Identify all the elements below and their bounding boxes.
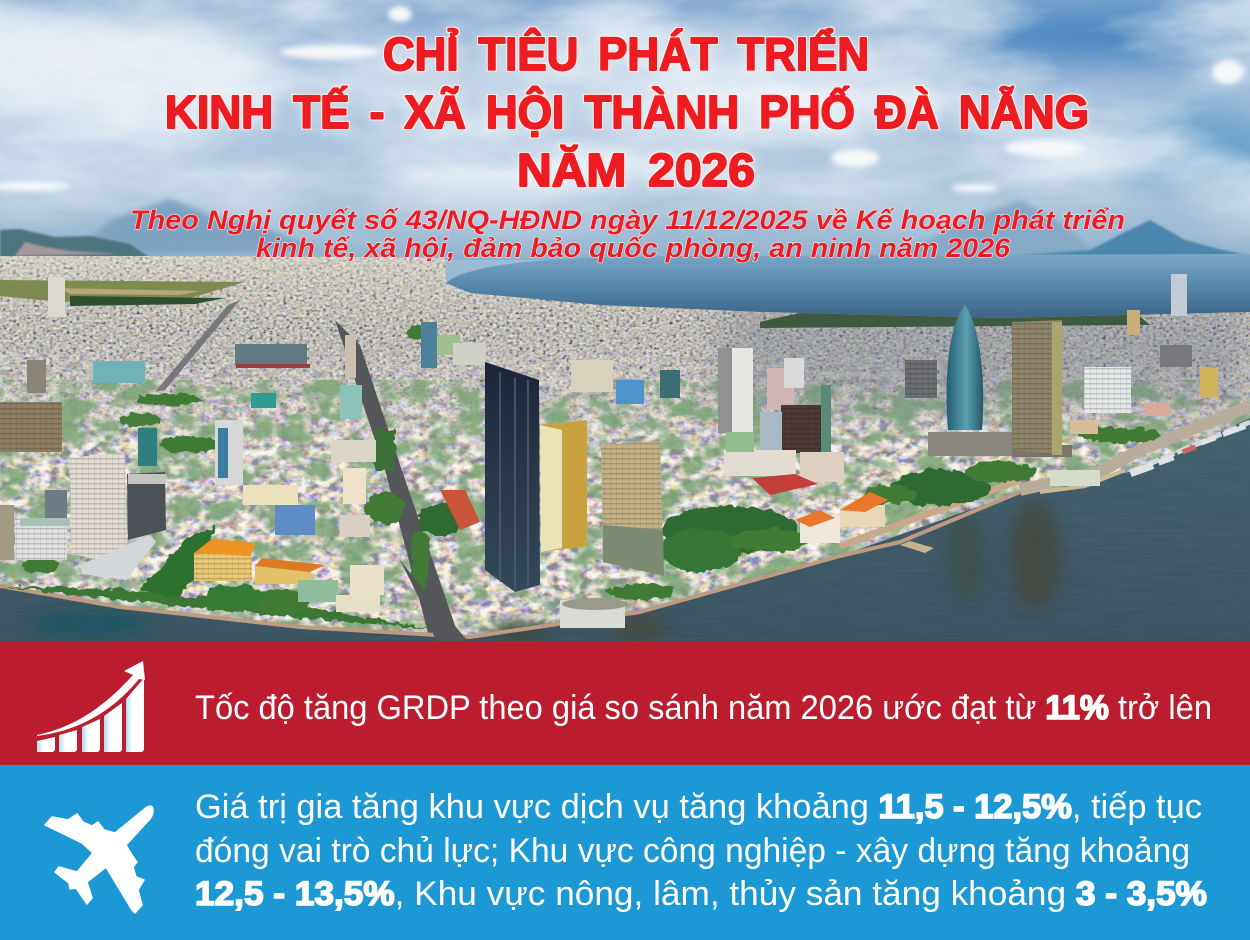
subtitle: Theo Nghị quyết số 43/NQ-HĐND ngày 11/12/2025 về Kế hoạch phát triển [130, 205, 1125, 235]
bridge road [400, 560, 468, 641]
icon: rising bar chart with arrow [37, 661, 145, 752]
subtitle: kinh tế, xã hội, đảm bảo quốc phòng, an ninh năm 2026 [256, 233, 1011, 263]
sector text: Giá trị gia tăng khu vực dịch vụ tăng khoảng 11,5 - 12,5%, tiếp tục [195, 788, 1202, 826]
moored boats [900, 424, 1246, 553]
subtitle [130, 205, 1125, 263]
sector text [195, 788, 1207, 913]
distant mountains [0, 199, 1250, 258]
landmark skyscrapers [69, 305, 1062, 592]
title: CHỈ TIÊU PHÁT TRIỂN [383, 28, 869, 80]
panel: GRDP growth [0, 641, 1250, 765]
sky with clouds [0, 0, 1250, 290]
colourful low-rise buildings [194, 474, 888, 612]
riverside embankment [0, 406, 1250, 637]
sector text: đóng vai trò chủ lực; Khu vực công nghiệp - xây dựng tăng khoảng [195, 832, 1190, 870]
sector text: 12,5 - 13,5%, Khu vực nông, lâm, thủy sản tăng khoảng 3 - 3,5% [195, 875, 1207, 913]
icon: airplane [45, 806, 153, 913]
city fabric [0, 250, 1250, 650]
far towers and mid-rise blocks [0, 274, 1218, 628]
tree groups [0, 325, 1160, 628]
panel: aerial city photo [0, 0, 1250, 650]
title [165, 28, 1089, 196]
title: KINH TẾ - XÃ HỘI THÀNH PHỐ ĐÀ NẴNG [165, 86, 1089, 138]
river and harbour water [0, 418, 1250, 642]
bay water [446, 254, 1250, 320]
title: NĂM 2026 [517, 144, 755, 196]
GRDP text: Tốc độ tăng GRDP theo giá so sánh năm 2026 ước đạt từ 11% trở lên [195, 689, 1212, 727]
panel: sector growth [0, 765, 1250, 940]
